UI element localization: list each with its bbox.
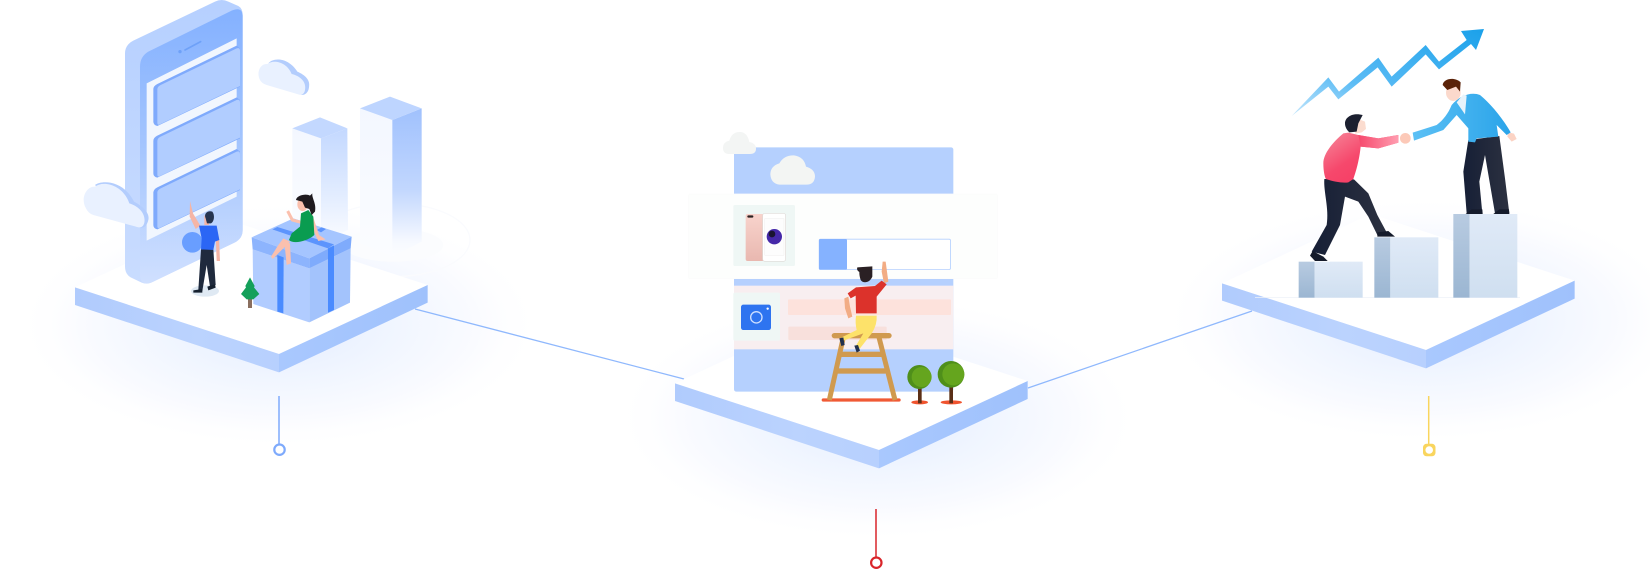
person: man helping [1413, 79, 1517, 214]
icon: tree [241, 277, 259, 308]
app card 3 [153, 149, 240, 229]
phone speaker [178, 42, 201, 53]
pink text bars [788, 299, 951, 340]
icon: small tree [907, 365, 932, 404]
step block high [1453, 214, 1517, 298]
person: climber [839, 262, 888, 353]
connector line: first to second platform [415, 309, 684, 379]
platform glow: right [1160, 195, 1650, 445]
phone [125, 0, 243, 284]
cloud: on page [770, 155, 815, 185]
app card 1 [153, 46, 240, 126]
person: woman sitting on gift [271, 193, 326, 265]
progress input box [819, 239, 950, 270]
translucent product row [688, 194, 998, 279]
bar building short [292, 117, 348, 242]
cloud: lower [84, 182, 149, 228]
panel: left platform, phone and gift [75, 0, 470, 372]
web page [688, 147, 998, 392]
product tile with phone photo [733, 205, 795, 266]
step block low [1299, 262, 1363, 298]
camera tile [733, 293, 780, 341]
platform glow: middle [613, 293, 1143, 543]
pink content row [734, 286, 953, 349]
pin marker: right, yellow [1423, 396, 1436, 456]
panel: middle platform, web page and climber [675, 132, 1028, 468]
panel: right platform, handshake and growth [1222, 29, 1575, 368]
platform glow: left [14, 200, 544, 450]
icon: large tree [938, 361, 964, 404]
step block middle [1374, 237, 1438, 298]
cloud: outside page [723, 132, 756, 154]
platform [1222, 214, 1575, 368]
app card 2 [153, 97, 240, 178]
pin marker: left, blue [274, 396, 285, 455]
person: man reaching [182, 201, 220, 297]
cloud: upper [259, 60, 309, 95]
person: man climbing [1310, 114, 1411, 261]
platform ripple [317, 203, 470, 277]
connector line: second to third platform [1028, 311, 1252, 388]
gift box [252, 218, 352, 322]
pin marker: middle, red [871, 509, 882, 568]
bar building tall [360, 97, 422, 257]
ladder [822, 333, 901, 402]
platform [675, 314, 1028, 468]
platform [75, 218, 428, 372]
growth arrow [1292, 29, 1484, 116]
